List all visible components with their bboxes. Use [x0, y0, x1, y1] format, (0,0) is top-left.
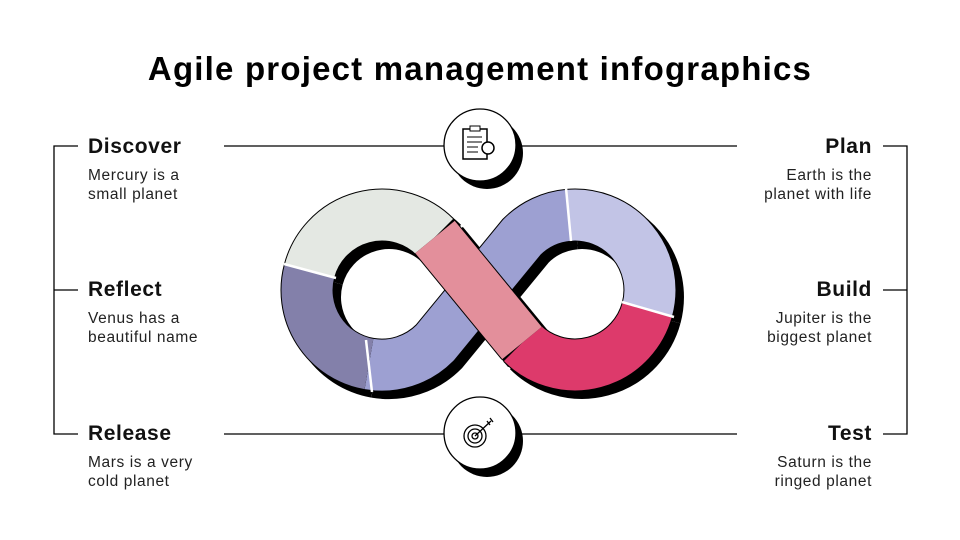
text: Reflect: Reflect: [88, 278, 162, 301]
text: Discover: small planet: [88, 186, 178, 203]
text: Discover: Mercury is a: [88, 167, 180, 184]
text: Plan: Plan: [825, 135, 872, 158]
text: Release: cold planet: [88, 473, 170, 490]
text: Test: [775, 422, 872, 490]
icon: clipboard: [444, 109, 523, 189]
text: Release: Release: [88, 422, 172, 445]
text: Plan: [764, 135, 872, 203]
infinity loop: [284, 188, 674, 392]
text: Discover: Discover: [88, 135, 182, 158]
title: Agile project management infographics: [148, 50, 812, 87]
text: Release: [88, 422, 193, 490]
text: Test: Test: [828, 422, 872, 445]
text: Build: Jupiter is the: [776, 310, 872, 327]
text: Reflect: Venus has a: [88, 310, 180, 327]
text: Build: Build: [816, 278, 872, 301]
text: Build: [767, 278, 872, 346]
text: Plan: planet with life: [764, 186, 872, 203]
connector lines: [54, 146, 907, 434]
text: Build: biggest planet: [767, 329, 872, 346]
text: Discover: [88, 135, 182, 203]
text: Test: ringed planet: [775, 473, 872, 490]
icon: target: [444, 397, 523, 477]
text: Reflect: beautiful name: [88, 329, 198, 346]
text: Release: Mars is a very: [88, 454, 193, 471]
text: Reflect: [88, 278, 198, 346]
text: Test: Saturn is the: [777, 454, 872, 471]
text: Plan: Earth is the: [786, 167, 872, 184]
